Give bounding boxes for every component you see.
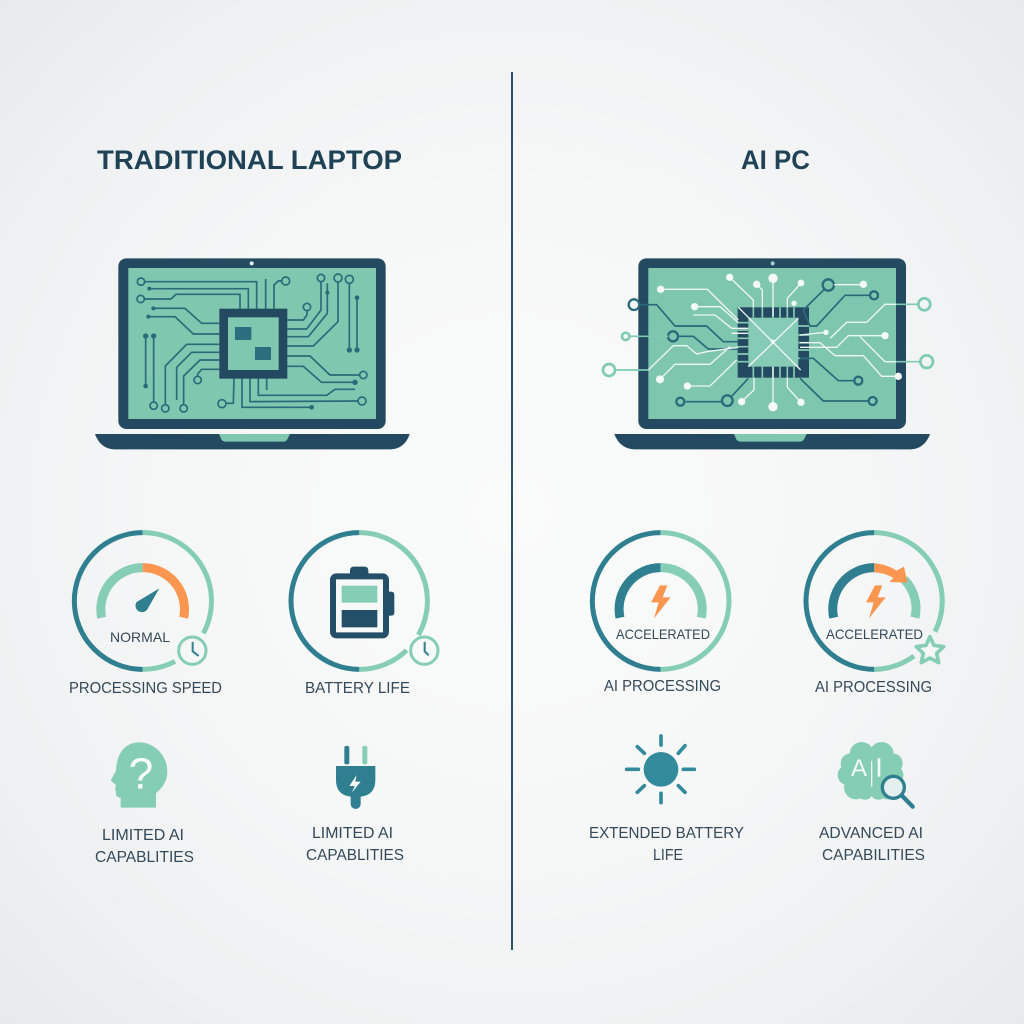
feature text: second line: CAPABILITIES [822, 847, 925, 864]
dial teal arc [833, 568, 874, 618]
circuit open nodes [137, 274, 367, 412]
dial mint arc [101, 568, 143, 618]
battery icon [333, 567, 394, 635]
gauge state label: ACCELERATED [826, 626, 923, 642]
feature text: limited AI capabilities: LIMITED AI [312, 825, 393, 842]
orange arrow [874, 563, 907, 583]
title: AI PC: AI PC [741, 145, 810, 175]
chip block one [235, 327, 251, 340]
circuit traces [144, 279, 360, 407]
webcam [771, 261, 775, 265]
dial orange arc [143, 568, 185, 618]
laptop body [638, 258, 906, 429]
laptop base [614, 434, 930, 449]
laptop body [118, 258, 386, 429]
icon: sun [627, 736, 694, 803]
chip pins [738, 307, 809, 378]
star badge [916, 637, 944, 663]
processor chip [738, 307, 809, 378]
mint outer lines [603, 298, 933, 376]
ring mint side [661, 533, 729, 669]
dial teal arc [619, 568, 661, 618]
ring mint side [143, 533, 211, 669]
chip core [748, 318, 798, 367]
gauge state label: NORMAL [110, 629, 170, 645]
feature text: advanced AI capabilities: ADVANCED AI [819, 825, 923, 842]
chip block two [255, 347, 271, 360]
ring mint side [874, 533, 942, 669]
ring mint side [359, 533, 427, 669]
laptop screen [128, 268, 376, 419]
feature text: extended battery life: EXTENDED BATTERY [589, 825, 744, 842]
base notch [734, 434, 807, 442]
circuit solid nodes [143, 287, 360, 410]
lightning bolt [866, 585, 886, 618]
lightning bolt [651, 585, 671, 618]
webcam [250, 261, 254, 265]
gauge: accelerated AI processing [592, 533, 729, 669]
dial mint arc [661, 568, 702, 618]
laptop screen [648, 268, 896, 419]
gauge: processing speed normal [74, 533, 211, 669]
laptop base [95, 434, 410, 449]
base notch [219, 434, 290, 442]
icon: head with question mark: ? [129, 749, 153, 798]
label: processing speed: PROCESSING SPEED [69, 680, 222, 697]
illustration: AI PC laptop with neural circuit [603, 258, 933, 449]
processor chip [219, 309, 287, 379]
illustration: traditional laptop with circuit board [95, 258, 410, 449]
white nodes [656, 274, 902, 411]
icon: head with question mark [111, 742, 167, 808]
icon: power plug [336, 746, 375, 809]
chip core [228, 317, 279, 370]
gauge: battery life [291, 533, 438, 669]
clock badge [411, 637, 438, 664]
gauge: accelerated AI processing with star [806, 533, 944, 669]
icon: AI brain with magnifier: A [851, 755, 867, 782]
ring teal side [592, 533, 661, 669]
title: traditional laptop: TRADITIONAL LAPTOP [97, 145, 402, 175]
feature text: limited AI capabilities: LIMITED AI [102, 827, 184, 844]
label: AI processing: AI PROCESSING [604, 678, 721, 695]
feature text: second line: CAPABLITIES [95, 849, 194, 866]
label: AI processing: AI PROCESSING [815, 679, 932, 696]
teal traces [629, 279, 878, 406]
clock badge [179, 637, 206, 664]
ring teal side [806, 533, 874, 669]
dial mint arc [904, 579, 916, 618]
white traces [648, 277, 898, 407]
ring teal side [291, 533, 359, 669]
label: battery life: BATTERY LIFE [305, 680, 410, 697]
feature text: second line: LIFE [653, 847, 683, 864]
icon: AI brain with magnifier [838, 742, 913, 807]
needle [136, 588, 159, 612]
gauge state label: ACCELERATED [616, 626, 710, 642]
feature text: second line: CAPABLITIES [306, 847, 404, 864]
ring [74, 533, 143, 669]
